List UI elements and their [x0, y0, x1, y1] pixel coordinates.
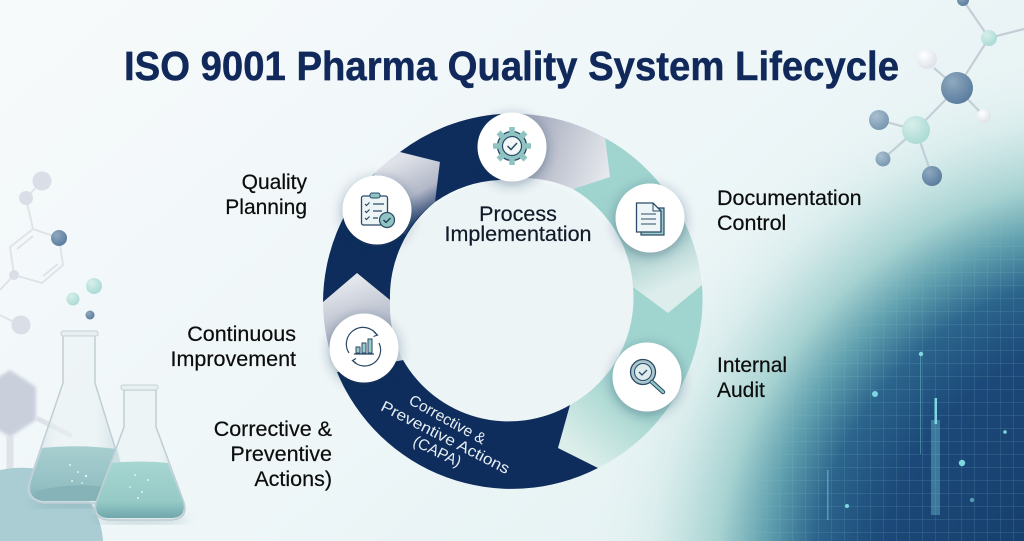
icon: magnifier — [612, 342, 682, 412]
label: internal audit: Internal — [717, 354, 787, 377]
cycle ring — [323, 114, 703, 489]
decoration: molecule left — [0, 172, 102, 470]
label: documentation control: Control — [717, 211, 786, 235]
label: continuous improvement: Continuous — [187, 322, 296, 346]
decoration: molecule top right — [869, 0, 1024, 186]
background — [362, 0, 1024, 541]
segment: quality planning — [323, 162, 440, 302]
label: documentation control: Documentation — [717, 186, 862, 210]
decoration: teal blob — [0, 468, 103, 541]
segment: internal audit — [558, 285, 703, 468]
icon: small flask — [92, 385, 188, 524]
title: ISO 9001 Pharma Quality System Lifecycle — [124, 43, 899, 89]
ring label: CAPA: Corrective & — [406, 392, 489, 448]
segment: continuous improvement — [323, 273, 403, 372]
icon: clipboard — [342, 176, 412, 244]
icon: improvement chart — [330, 314, 398, 382]
label: process implementation: Process — [479, 202, 557, 226]
label: internal audit: Audit — [717, 379, 765, 402]
segment: corrective and preventive actions — [337, 360, 598, 489]
segment: navy top — [400, 114, 520, 202]
label: quality planning: Planning — [225, 196, 307, 219]
segment: documentation control — [573, 138, 702, 313]
icon: large flask — [28, 331, 130, 508]
label: corrective and preventive actions: Preventive — [230, 442, 332, 466]
label: process implementation: Implementation — [444, 222, 592, 246]
ring label: CAPA: (CAPA) — [410, 433, 464, 471]
segment: process implementation — [500, 114, 610, 189]
ring label: CAPA: Preventive Actions — [378, 398, 512, 478]
icon: gear — [478, 112, 546, 182]
label: continuous improvement: Improvement — [171, 347, 296, 371]
icon: document — [616, 184, 684, 252]
label: corrective and preventive actions: Actions) — [254, 467, 332, 491]
label: quality planning: Quality — [242, 171, 307, 194]
label: corrective and preventive actions: Corrective & — [214, 417, 332, 441]
